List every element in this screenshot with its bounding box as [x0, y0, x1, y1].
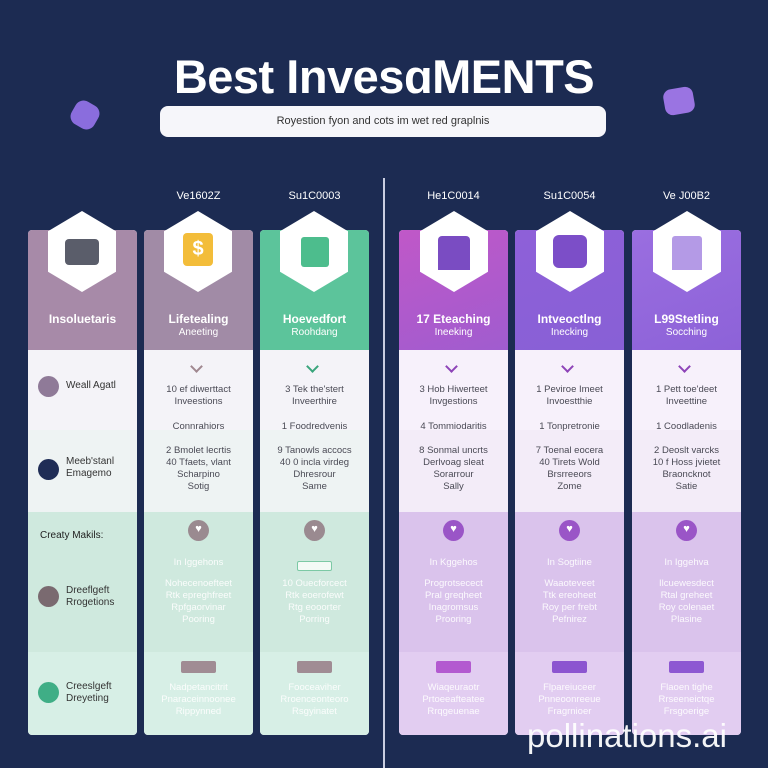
column 5: Fragrnioer [548, 706, 591, 717]
version labels [176, 190, 710, 202]
column 3: Same [302, 481, 327, 492]
column 5: 1 Tonpretronie [539, 421, 600, 432]
column 5: Flpareiuceer [543, 682, 596, 693]
column 4: Progrotsecect [424, 578, 483, 589]
column 6: Socching [666, 327, 707, 338]
column 4: 4 Tommiodaritis [420, 421, 487, 432]
column 2: Rippynned [176, 706, 221, 717]
column 3: 1 Foodredvenis [282, 421, 347, 432]
column 6: Rrseeneictqe [658, 694, 714, 705]
version labels: Ve1602Z [176, 190, 221, 202]
column 2: Pnaraceinnoonee [161, 694, 236, 705]
column 3: 3 Tek the'stert [285, 384, 344, 395]
column 5: Invoestthie [547, 396, 592, 407]
column 1: categories: Emagemo [66, 468, 112, 479]
column 2: In Iggehons [174, 557, 223, 568]
column 4: Pral greqheet [425, 590, 482, 601]
column 1: categories: Weall Agatl [66, 380, 116, 391]
column 6: Frsgoerige [664, 706, 709, 717]
column 3: Inveerthire [292, 396, 337, 407]
column 1: categories: Dreeflgeft [66, 585, 109, 596]
column 2: 40 Tfaets, vlant [166, 457, 231, 468]
column 5: Brsrreeors [547, 469, 592, 480]
column 5: Waaoteveet [544, 578, 595, 589]
column 3: Roohdang [291, 327, 338, 338]
column 2: Inveestions [174, 396, 223, 407]
icon hex 6 [653, 211, 721, 292]
column 2: 10 ef diwerttact [166, 384, 231, 395]
column 3: 9 Tanowls accocs [277, 445, 352, 456]
column 6: L99Stetling [654, 312, 719, 326]
column 3: Fooceaviher [288, 682, 341, 693]
column 3: 40 0 incla virdeg [280, 457, 349, 468]
decorative blob left [67, 97, 103, 133]
column 4: In Kggehos [429, 557, 478, 568]
icon hex 2: $ [192, 238, 204, 260]
column 2 [144, 230, 253, 735]
subtitle banner: Royestion fyon and cots im wet red graplnis [277, 115, 489, 127]
column 5: 7 Toenal eocera [536, 445, 603, 456]
column 6: Ilcuewesdect [659, 578, 714, 589]
column 1: categories: Meeb'stanl [66, 456, 114, 467]
column 6: Braoncknot [662, 469, 711, 480]
column 6: In Iggehva [664, 557, 709, 568]
column 1: categories: Creeslgeft [66, 681, 112, 692]
version labels: Su1C0003 [288, 190, 340, 202]
column 5: Zome [557, 481, 582, 492]
column 4: Derlvoag sleat [423, 457, 484, 468]
column 2: Nadpetancitrit [169, 682, 228, 693]
column 5: 40 Tirets Wold [539, 457, 600, 468]
column 5: Pefnirez [552, 614, 587, 625]
column 6: 2 Deoslt varcks [654, 445, 719, 456]
column 3: Hoevedfort [283, 312, 346, 326]
icon hex 5 [536, 211, 604, 292]
column 1: categories: Insoluetaris [49, 312, 116, 326]
column 1: categories: Rrogetions [66, 597, 114, 608]
column 3: Rroenceonteoro [280, 694, 349, 705]
decorative blob right [662, 86, 696, 116]
column 3: Rtg eooorter [288, 602, 341, 613]
column 2: Rpfgaorvinar [171, 602, 226, 613]
column 5: 1 Peviroe Imeet [536, 384, 603, 395]
column 2: Sotig [188, 481, 209, 492]
column 2: Nohecenoefteet [165, 578, 232, 589]
column 3: Rsgyinatet [292, 706, 337, 717]
column 4: Prooring [436, 614, 471, 625]
column 2: Connrahiors [173, 421, 224, 432]
column 4: Rrqgeuenae [427, 706, 480, 717]
column 6: 1 Pett toe'deet [656, 384, 717, 395]
column 6: Inveettine [666, 396, 707, 407]
version labels: Ve J00B2 [663, 190, 710, 202]
icon hex 1 [48, 211, 116, 292]
column 5: Intveoctlng [537, 312, 602, 326]
column 4: Invgestions [429, 396, 478, 407]
column 3: Dhresrour [293, 469, 336, 480]
column 2: Lifetealing [168, 312, 228, 326]
column 4: Prtoeeafteatee [422, 694, 485, 705]
column 6: Rtal greheet [661, 590, 712, 601]
column 1: categories: Dreyeting [66, 693, 109, 704]
column 6: Satie [676, 481, 697, 492]
icon hex 4 [420, 211, 488, 292]
column 5: Pnneoonreeue [538, 694, 601, 705]
column 5 [515, 230, 624, 735]
column 6: Flaoen tighe [660, 682, 713, 693]
column 2: Pooring [182, 614, 215, 625]
watermark: pollinations.ai [527, 717, 727, 754]
version labels: He1C0014 [427, 190, 480, 202]
column 5: In Sogtiine [547, 557, 592, 568]
column 4 [399, 230, 508, 735]
title: Best InvesɑMENTS [174, 50, 594, 103]
column 2: Aneeting [179, 327, 218, 338]
column 4: 3 Hob Hiwerteet [419, 384, 488, 395]
icon hex 2 [164, 211, 232, 292]
divider [383, 178, 385, 768]
column 4: 17 Eteaching [416, 312, 491, 326]
column 4: 8 Sonmal uncrts [419, 445, 488, 456]
icon hex 3 [280, 211, 348, 292]
column 4: Ineeking [435, 327, 472, 338]
subtitle banner [160, 106, 606, 137]
row labels [38, 376, 59, 397]
column 6: Roy colenaet [659, 602, 714, 613]
column 6: 1 Coodladenis [656, 421, 717, 432]
column 4: Sorarrour [433, 469, 474, 480]
column 2: Rtk epreghfreet [166, 590, 231, 601]
column 2: Scharpino [177, 469, 220, 480]
column 4: Wiaqeuraotr [428, 682, 479, 693]
version labels: Su1C0054 [544, 190, 596, 202]
column 5: Roy per frebt [542, 602, 597, 613]
column 3 [260, 230, 369, 735]
column 3: Rtk eoerofewt [285, 590, 344, 601]
column 2: 2 Bmolet lecrtis [166, 445, 231, 456]
column 6: Plasine [671, 614, 702, 625]
column 5: Inecking [551, 327, 588, 338]
column 6: 10 f Hoss jvietet [653, 457, 720, 468]
column 3: Porring [299, 614, 330, 625]
column 1: categories: Creaty Makils: [40, 530, 103, 541]
column 3: 10 Ouecforcect [282, 578, 347, 589]
column 4: Sally [443, 481, 464, 492]
column 6 [632, 230, 741, 735]
column 5: Ttk ereoheet [543, 590, 596, 601]
column 1: categories [28, 230, 137, 735]
column 4: Inagromsus [429, 602, 478, 613]
